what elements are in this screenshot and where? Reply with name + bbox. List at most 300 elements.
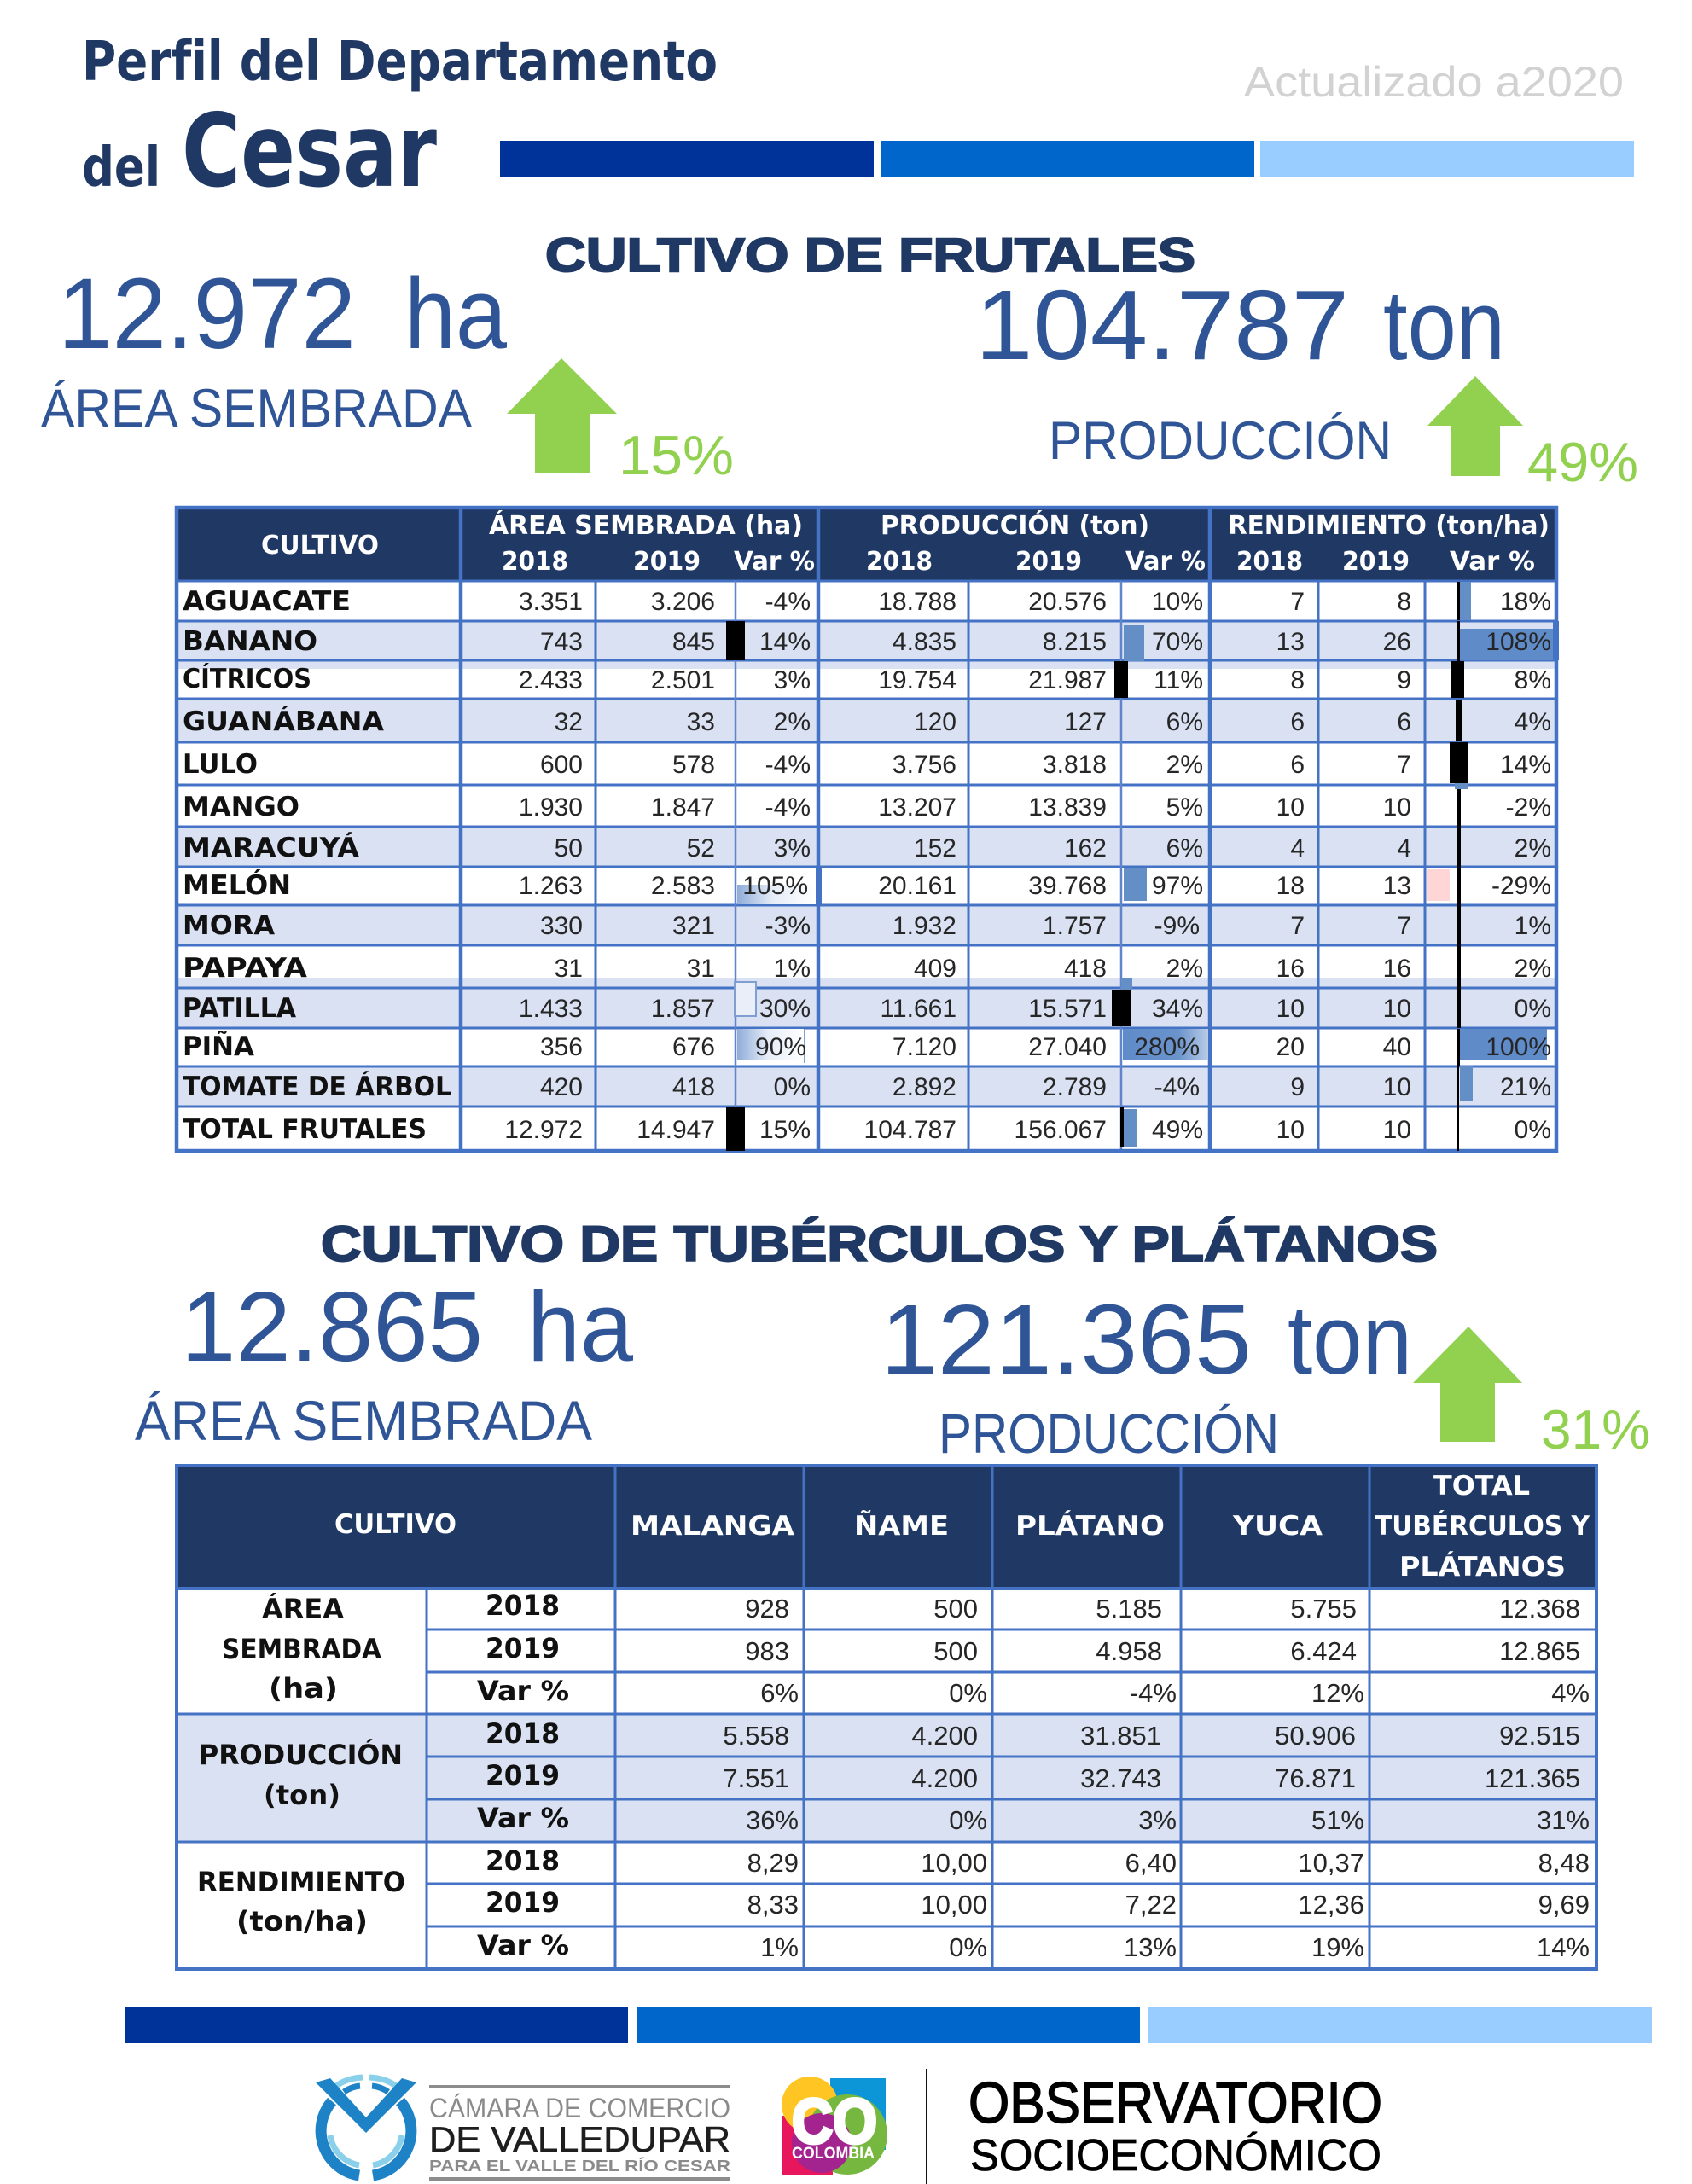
logo: observatorio socioeconomico: SOCIOECONÓMICO bbox=[970, 2131, 1381, 2181]
row: total frutales: 14.947 bbox=[637, 1116, 715, 1144]
table header labels: 2018 bbox=[866, 547, 933, 577]
area 2018: 12.368 bbox=[1499, 1594, 1580, 1623]
stat: area sembrada tuberculos: ÁREA SEMBRADA bbox=[135, 1389, 592, 1452]
row: patilla: 34% bbox=[1152, 995, 1203, 1023]
row: banano: 13 bbox=[1276, 628, 1305, 656]
row: tomate de arbol: 418 bbox=[672, 1073, 715, 1101]
row: pina: 356 bbox=[540, 1033, 583, 1061]
row group labels: (ton) bbox=[264, 1779, 340, 1811]
title: Perfil del Departamento bbox=[82, 31, 718, 94]
row: total frutales: 10 bbox=[1276, 1116, 1305, 1144]
area 2019: 2019 bbox=[486, 1632, 560, 1664]
table header labels: Var % bbox=[1450, 547, 1535, 577]
heading: cultivo de tuberculos y platanos: CULTIVO DE TUBÉRCULOS Y PLÁTANOS bbox=[321, 1217, 1438, 1272]
row: citricos: 8 bbox=[1290, 666, 1305, 694]
area var: 6% bbox=[760, 1678, 799, 1708]
stat: area sembrada tuberculos: 12.865 bbox=[181, 1271, 483, 1382]
rendimiento 2019: 8,33 bbox=[747, 1890, 799, 1920]
row: aguacate: 20.576 bbox=[1028, 588, 1107, 616]
row: lulo: LULO bbox=[183, 749, 258, 780]
row: citricos: CÍTRICOS bbox=[183, 664, 311, 694]
area 2018: 2018 bbox=[486, 1589, 560, 1622]
row: aguacate: 10% bbox=[1152, 588, 1203, 616]
logo: colombia bbox=[782, 2077, 887, 2175]
row: total frutales: TOTAL FRUTALES bbox=[183, 1114, 427, 1145]
row: total frutales bbox=[183, 1114, 1551, 1145]
produccion 2019: 32.743 bbox=[1080, 1763, 1161, 1793]
area 2018 bbox=[486, 1589, 1580, 1623]
row: mora: -9% bbox=[1154, 912, 1200, 940]
produccion 2018: 2018 bbox=[486, 1717, 560, 1750]
rendimiento 2019: 10,00 bbox=[921, 1890, 987, 1920]
row: citricos: 11% bbox=[1154, 666, 1203, 694]
row: maracuya: 6% bbox=[1166, 834, 1203, 863]
table header labels: RENDIMIENTO (ton/ha) bbox=[1228, 511, 1550, 541]
table header labels: MALANGA bbox=[631, 1511, 794, 1542]
stat: area sembrada tuberculos: ha bbox=[527, 1271, 633, 1382]
row: papaya: 31 bbox=[687, 955, 715, 983]
row: banano: 70% bbox=[1152, 628, 1203, 656]
table header labels: PLÁTANOS bbox=[1399, 1552, 1566, 1583]
logo: camara de comercio emblem bbox=[316, 2077, 416, 2175]
area 2019: 4.958 bbox=[1096, 1636, 1162, 1666]
table header labels: TUBÉRCULOS Y bbox=[1375, 1511, 1590, 1542]
table header background bbox=[177, 1466, 1596, 1589]
row: citricos: 21.987 bbox=[1028, 666, 1107, 694]
row: total frutales: 156.067 bbox=[1015, 1116, 1107, 1144]
row: guanabana: 33 bbox=[687, 708, 715, 736]
row: pina: 280% bbox=[1134, 1033, 1200, 1061]
row: papaya bbox=[183, 953, 1551, 984]
row: banano: 743 bbox=[540, 628, 583, 656]
row: patilla: 1.433 bbox=[519, 995, 583, 1023]
row: aguacate: 3.206 bbox=[651, 588, 715, 616]
table header labels: 2018 bbox=[502, 547, 568, 577]
table header labels: YUCA bbox=[1232, 1511, 1323, 1542]
area 2019: 500 bbox=[933, 1636, 978, 1666]
row: pina: PIÑA bbox=[183, 1031, 254, 1062]
row: tomate de arbol: 9 bbox=[1290, 1073, 1305, 1101]
area 2019: 6.424 bbox=[1290, 1636, 1357, 1666]
row group labels: (ton/ha) bbox=[236, 1905, 368, 1937]
percent production: 49% bbox=[1527, 431, 1638, 493]
row: melon: 1.263 bbox=[519, 872, 583, 900]
row: banano: 14% bbox=[759, 628, 811, 656]
row: lulo bbox=[183, 749, 1551, 780]
row: patilla: PATILLA bbox=[183, 993, 296, 1024]
area 2018: 500 bbox=[933, 1594, 978, 1623]
area 2019 bbox=[486, 1632, 1580, 1666]
data bars bbox=[726, 582, 1559, 1151]
row: aguacate: -4% bbox=[765, 588, 811, 616]
rendimiento var: 19% bbox=[1311, 1932, 1364, 1962]
row: lulo: 14% bbox=[1500, 751, 1551, 779]
produccion 2019: 4.200 bbox=[911, 1763, 978, 1793]
row: guanabana: 32 bbox=[555, 708, 583, 736]
row group labels: PRODUCCIÓN bbox=[199, 1738, 403, 1771]
row: tomate de arbol: 10 bbox=[1383, 1073, 1411, 1101]
stat: produccion tuberculos bbox=[881, 1284, 1412, 1465]
stat: produccion frutales: PRODUCCIÓN bbox=[1049, 411, 1392, 471]
row: citricos: 19.754 bbox=[878, 666, 956, 694]
row: maracuya bbox=[183, 833, 1551, 863]
table header labels: Var % bbox=[734, 547, 815, 577]
row: melon: MELÓN bbox=[183, 869, 291, 901]
row: tomate de arbol: -4% bbox=[1154, 1073, 1200, 1101]
produccion var: 51% bbox=[1311, 1805, 1364, 1835]
row: mora: 7 bbox=[1290, 912, 1305, 940]
row: total frutales: 0% bbox=[1515, 1116, 1551, 1144]
row: maracuya: 52 bbox=[687, 834, 715, 863]
produccion var: 31% bbox=[1537, 1805, 1590, 1835]
row: citricos: 2.501 bbox=[651, 666, 715, 694]
rendimiento var: 14% bbox=[1537, 1932, 1590, 1962]
row: aguacate: 8 bbox=[1397, 588, 1411, 616]
area var: 0% bbox=[949, 1678, 987, 1708]
row group labels: SEMBRADA bbox=[222, 1633, 381, 1665]
area var: 4% bbox=[1551, 1678, 1590, 1708]
row group labels bbox=[197, 1593, 405, 1937]
table header labels bbox=[334, 1471, 1590, 1583]
row: guanabana: 6 bbox=[1397, 708, 1411, 736]
row: tomate de arbol: 420 bbox=[540, 1073, 583, 1101]
row: maracuya: 162 bbox=[1064, 834, 1107, 863]
table header labels: 2019 bbox=[1342, 547, 1410, 577]
row: patilla: 10 bbox=[1383, 995, 1411, 1023]
row: melon: 13 bbox=[1383, 872, 1411, 900]
row: tomate de arbol bbox=[183, 1072, 1551, 1102]
row: guanabana: 6% bbox=[1166, 708, 1203, 736]
rendimiento 2018: 10,00 bbox=[921, 1848, 987, 1878]
area var bbox=[477, 1675, 1590, 1708]
heading: cultivo de frutales: CULTIVO DE FRUTALES bbox=[545, 228, 1195, 282]
row: banano bbox=[183, 626, 1551, 657]
row: papaya: PAPAYA bbox=[183, 953, 307, 984]
produccion 2018: 92.515 bbox=[1499, 1721, 1580, 1751]
row: melon: -29% bbox=[1491, 872, 1551, 900]
row: mango: -2% bbox=[1506, 793, 1551, 822]
row group labels: ÁREA bbox=[262, 1593, 344, 1625]
rendimiento 2018: 10,37 bbox=[1298, 1848, 1364, 1878]
logo: camara de comercio text: PARA EL VALLE DEL RÍO CESAR bbox=[429, 2157, 730, 2175]
table header labels: TOTAL bbox=[1433, 1471, 1530, 1502]
row: maracuya: 2% bbox=[1515, 834, 1551, 863]
table header labels: Var % bbox=[1125, 547, 1206, 577]
top colour bars bbox=[500, 141, 1634, 177]
row: banano: 8.215 bbox=[1043, 628, 1107, 656]
rendimiento 2018: 8,29 bbox=[747, 1848, 799, 1878]
row: papaya: 418 bbox=[1064, 955, 1107, 983]
row: patilla: 15.571 bbox=[1028, 995, 1107, 1023]
row: melon: 39.768 bbox=[1028, 872, 1107, 900]
row: lulo: 6 bbox=[1290, 751, 1305, 779]
rendimiento 2019: 2019 bbox=[486, 1886, 560, 1919]
table header labels: CULTIVO bbox=[261, 531, 379, 561]
logo: observatorio socioeconomico bbox=[968, 2071, 1382, 2181]
table header labels: 2018 bbox=[1236, 547, 1303, 577]
rendimiento var: 13% bbox=[1124, 1932, 1177, 1962]
produccion var: Var % bbox=[477, 1802, 569, 1834]
row: maracuya: 152 bbox=[914, 834, 956, 863]
row: melon: 97% bbox=[1152, 872, 1203, 900]
row: lulo: -4% bbox=[765, 751, 811, 779]
row: citricos bbox=[183, 664, 1551, 694]
area 2018: 5.755 bbox=[1290, 1594, 1357, 1623]
stat: produccion frutales: ton bbox=[1383, 270, 1505, 380]
rendimiento 2018: 6,40 bbox=[1125, 1848, 1177, 1878]
row: guanabana: 120 bbox=[914, 708, 956, 736]
row: aguacate: 7 bbox=[1290, 588, 1305, 616]
row group labels: RENDIMIENTO bbox=[197, 1866, 405, 1898]
table header labels: ÁREA SEMBRADA (ha) bbox=[489, 510, 803, 541]
table: frutales bbox=[177, 508, 1559, 1151]
row: maracuya: 4 bbox=[1397, 834, 1411, 863]
produccion 2018: 5.558 bbox=[723, 1721, 789, 1751]
table header labels: CULTIVO bbox=[334, 1509, 456, 1540]
icon: up arrow tuberculos bbox=[1413, 1327, 1522, 1442]
area var: Var % bbox=[477, 1675, 569, 1707]
area 2018: 928 bbox=[745, 1594, 789, 1623]
logo: colombia: COLOMBIA bbox=[792, 2145, 875, 2163]
row: citricos: 8% bbox=[1515, 666, 1551, 694]
icon: up arrow production bbox=[1427, 376, 1523, 476]
rendimiento var: 0% bbox=[949, 1932, 987, 1962]
row: guanabana: 4% bbox=[1515, 708, 1551, 736]
table header labels: ÑAME bbox=[854, 1510, 949, 1542]
row: pina: 20 bbox=[1276, 1033, 1305, 1061]
row: banano: 26 bbox=[1383, 628, 1411, 656]
row: patilla: 11.661 bbox=[880, 995, 956, 1023]
row: mango: 13.839 bbox=[1028, 793, 1107, 822]
row: patilla: 1.857 bbox=[651, 995, 715, 1023]
row: mango: 10 bbox=[1276, 793, 1305, 822]
rendimiento 2018: 2018 bbox=[486, 1844, 560, 1877]
row: aguacate: 3.351 bbox=[519, 588, 583, 616]
row: pina: 90% bbox=[755, 1033, 806, 1061]
row: pina: 7.120 bbox=[893, 1033, 956, 1061]
row: papaya: 2% bbox=[1166, 955, 1203, 983]
row: melon: 2.583 bbox=[651, 872, 715, 900]
percent tuberculos: 31% bbox=[1541, 1398, 1650, 1461]
row: mora: 7 bbox=[1397, 912, 1411, 940]
area 2018: 5.185 bbox=[1096, 1594, 1162, 1623]
row: guanabana: 6 bbox=[1290, 708, 1305, 736]
row: total frutales: 10 bbox=[1383, 1116, 1411, 1144]
row: lulo: 2% bbox=[1166, 751, 1203, 779]
stat: area sembrada tuberculos bbox=[135, 1271, 633, 1452]
row: banano: 108% bbox=[1486, 628, 1551, 656]
row: lulo: 3.818 bbox=[1043, 751, 1107, 779]
row: melon: 18 bbox=[1276, 872, 1305, 900]
rendimiento 2019: 7,22 bbox=[1125, 1890, 1177, 1920]
rendimiento 2018: 8,48 bbox=[1538, 1848, 1590, 1878]
row: maracuya: 3% bbox=[774, 834, 811, 863]
row: mora: 1.757 bbox=[1043, 912, 1107, 940]
row: mango: 1.847 bbox=[651, 793, 715, 822]
table grid bbox=[177, 1466, 1596, 1969]
row: papaya: 2% bbox=[1515, 955, 1551, 983]
updated date label: Actualizado a2020 bbox=[1244, 58, 1624, 106]
produccion var: 0% bbox=[949, 1805, 987, 1835]
icon: up arrow area bbox=[507, 358, 617, 473]
stat: produccion tuberculos: ton bbox=[1288, 1284, 1412, 1395]
produccion 2018: 31.851 bbox=[1080, 1721, 1161, 1751]
row: citricos: 9 bbox=[1397, 666, 1411, 694]
logo: camara de comercio text bbox=[429, 2085, 730, 2181]
produccion 2018 bbox=[486, 1717, 1580, 1751]
row: maracuya: MARACUYÁ bbox=[183, 833, 359, 863]
row: papaya: 31 bbox=[555, 955, 583, 983]
row: guanabana: 2% bbox=[774, 708, 811, 736]
produccion 2018: 4.200 bbox=[911, 1721, 978, 1751]
row: lulo: 7 bbox=[1397, 751, 1411, 779]
row: mango bbox=[183, 792, 1551, 822]
stat: produccion frutales bbox=[975, 270, 1505, 471]
table header labels: PLÁTANO bbox=[1015, 1511, 1165, 1542]
row: papaya: 1% bbox=[774, 955, 811, 983]
row: guanabana bbox=[183, 706, 1551, 737]
row: mora: 1% bbox=[1515, 912, 1551, 940]
row: melon bbox=[183, 869, 1551, 901]
area var: -4% bbox=[1130, 1678, 1177, 1708]
title: del bbox=[82, 136, 160, 200]
logo: camara de comercio text: DE VALLEDUPAR bbox=[429, 2119, 730, 2159]
row: patilla: 30% bbox=[759, 995, 811, 1023]
row: total frutales: 49% bbox=[1152, 1116, 1203, 1144]
row: tomate de arbol: 2.789 bbox=[1043, 1073, 1107, 1101]
row: pina: 100% bbox=[1486, 1033, 1551, 1061]
area var: 12% bbox=[1311, 1678, 1364, 1708]
row: citricos: 2.433 bbox=[519, 666, 583, 694]
row: mango: 10 bbox=[1383, 793, 1411, 822]
table header labels: 2019 bbox=[1015, 547, 1082, 577]
row: mango: 1.930 bbox=[519, 793, 583, 822]
divider line bbox=[926, 2069, 927, 2184]
row: tomate de arbol: 0% bbox=[774, 1073, 811, 1101]
stat: area sembrada frutales: ha bbox=[404, 258, 507, 370]
row: mango: 5% bbox=[1166, 793, 1203, 822]
row: lulo: 600 bbox=[540, 751, 583, 779]
row: mora: 321 bbox=[672, 912, 715, 940]
row: aguacate: 18% bbox=[1500, 588, 1551, 616]
row: tomate de arbol: 2.892 bbox=[893, 1073, 956, 1101]
row: mango: MANGO bbox=[183, 792, 299, 822]
row: banano: BANANO bbox=[183, 626, 317, 657]
row: pina: 40 bbox=[1383, 1033, 1411, 1061]
row: aguacate: AGUACATE bbox=[183, 586, 351, 617]
row: tomate de arbol: 21% bbox=[1500, 1073, 1551, 1101]
row: total frutales: 12.972 bbox=[504, 1116, 583, 1144]
row: papaya: 409 bbox=[914, 955, 956, 983]
rendimiento var bbox=[477, 1929, 1590, 1962]
stat: produccion frutales: 104.787 bbox=[975, 270, 1349, 380]
row: patilla bbox=[183, 993, 1551, 1024]
row: guanabana: 127 bbox=[1064, 708, 1107, 736]
row: maracuya: 4 bbox=[1290, 834, 1305, 863]
row: aguacate bbox=[183, 586, 1551, 617]
rendimiento 2019 bbox=[486, 1886, 1590, 1920]
bottom colour bars bbox=[125, 2007, 1652, 2043]
produccion var: 36% bbox=[746, 1805, 799, 1835]
stat: produccion tuberculos: 121.365 bbox=[881, 1284, 1252, 1395]
row: mango: -4% bbox=[765, 793, 811, 822]
row: patilla: 0% bbox=[1515, 995, 1551, 1023]
table header labels: PRODUCCIÓN (ton) bbox=[881, 509, 1149, 541]
row: tomate de arbol: TOMATE DE ÁRBOL bbox=[183, 1072, 451, 1102]
table: tuberculos y platanos bbox=[177, 1466, 1596, 1969]
row: melon: 105% bbox=[742, 872, 808, 900]
rendimiento 2019: 9,69 bbox=[1538, 1890, 1590, 1920]
rendimiento var: 1% bbox=[760, 1932, 799, 1962]
table grid bbox=[177, 581, 1556, 1151]
row: papaya: 16 bbox=[1383, 955, 1411, 983]
stat: produccion tuberculos: PRODUCCIÓN bbox=[939, 1402, 1279, 1465]
table header labels bbox=[261, 509, 1550, 577]
rendimiento 2019: 12,36 bbox=[1298, 1890, 1364, 1920]
row group labels: (ha) bbox=[269, 1672, 338, 1705]
stat: area sembrada frutales: 12.972 bbox=[58, 258, 356, 370]
row: patilla: 10 bbox=[1276, 995, 1305, 1023]
title: Cesar bbox=[182, 93, 437, 211]
logo: camara de comercio text: CÁMARA DE COMERCIO bbox=[429, 2093, 730, 2123]
produccion 2019 bbox=[486, 1759, 1580, 1793]
row: pina: 27.040 bbox=[1028, 1033, 1107, 1061]
table header background bbox=[177, 508, 1556, 581]
produccion 2018: 50.906 bbox=[1275, 1721, 1356, 1751]
row: pina bbox=[183, 1031, 1551, 1062]
row: pina: 676 bbox=[672, 1033, 715, 1061]
row: total frutales: 15% bbox=[759, 1116, 811, 1144]
rendimiento 2018 bbox=[486, 1844, 1590, 1878]
row: melon: 20.161 bbox=[878, 872, 956, 900]
percent area: 15% bbox=[619, 424, 734, 486]
row: maracuya: 50 bbox=[555, 834, 583, 863]
row stripes bbox=[177, 621, 1556, 1107]
row: lulo: 578 bbox=[672, 751, 715, 779]
row: aguacate: 18.788 bbox=[878, 588, 956, 616]
area 2019: 12.865 bbox=[1499, 1636, 1580, 1666]
produccion 2019: 2019 bbox=[486, 1759, 560, 1792]
stat: area sembrada frutales: ÁREA SEMBRADA bbox=[41, 379, 472, 439]
produccion var: 3% bbox=[1138, 1805, 1177, 1835]
logo: colombia: CO bbox=[792, 2086, 877, 2157]
production band bbox=[177, 1714, 1596, 1842]
area 2019: 983 bbox=[745, 1636, 789, 1666]
row: mora: -3% bbox=[765, 912, 811, 940]
rendimiento var: Var % bbox=[477, 1929, 569, 1961]
row: mora: 330 bbox=[540, 912, 583, 940]
row: mango: 13.207 bbox=[878, 793, 956, 822]
produccion var bbox=[477, 1802, 1590, 1835]
row: mora: 1.932 bbox=[893, 912, 956, 940]
row: total frutales: 104.787 bbox=[864, 1116, 956, 1144]
produccion 2019: 121.365 bbox=[1485, 1763, 1580, 1793]
row: papaya: 16 bbox=[1276, 955, 1305, 983]
row: guanabana: GUANÁBANA bbox=[183, 706, 384, 737]
produccion 2019: 7.551 bbox=[723, 1763, 789, 1793]
title bbox=[82, 31, 718, 211]
row: banano: 4.835 bbox=[893, 628, 956, 656]
stat: area sembrada frutales bbox=[41, 258, 507, 439]
table header labels: 2019 bbox=[633, 547, 701, 577]
row: mora bbox=[183, 910, 1551, 941]
row: mora: MORA bbox=[183, 910, 275, 941]
row: banano: 845 bbox=[672, 628, 715, 656]
row: citricos: 3% bbox=[774, 666, 811, 694]
logo: observatorio socioeconomico: OBSERVATORIO bbox=[968, 2071, 1382, 2135]
row: lulo: 3.756 bbox=[893, 751, 956, 779]
produccion 2019: 76.871 bbox=[1275, 1763, 1356, 1793]
